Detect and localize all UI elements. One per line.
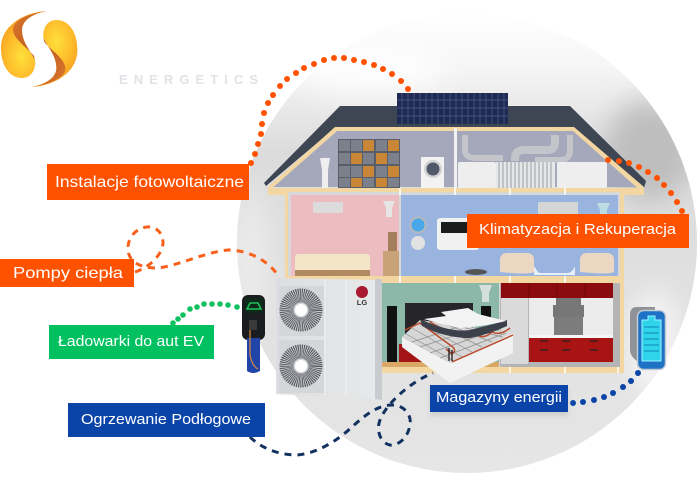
middle floor [288,276,624,283]
background circle [237,58,697,473]
heat pump unit [276,278,382,400]
attic interior [270,130,640,187]
connector: energy storage [570,370,641,406]
kitchen [500,283,620,367]
label: solar [47,164,249,200]
pink bedroom [291,195,399,277]
label: air conditioning: Klimatyzacja i Rekuperacja [479,221,677,238]
battery icon [630,307,666,370]
connector: air conditioning [605,157,685,214]
label: solar: Instalacje fotowoltaiczne [55,174,244,191]
roof [264,106,646,188]
label: EV chargers [49,325,214,359]
label: energy storage: Magazyny energii [436,389,562,406]
brand name: ENERGETICS [119,72,258,87]
fan bottom [279,340,324,393]
connector: underfloor heating [250,373,433,455]
connector: EV charger [170,301,240,326]
label: heat pumps: Pompy ciepła [13,265,123,282]
attic floor [268,188,644,195]
logo right lobe [31,20,77,87]
logo left lobe [1,11,47,78]
label: air conditioning [467,214,689,248]
label: underfloor heating: Ogrzewanie Podłogowe [81,411,251,428]
connector: heat pump [128,227,279,277]
attic divider [454,128,457,189]
bottom floor [288,367,624,373]
underfloor heating block [402,308,513,383]
vase duct [320,158,330,188]
LG logo: LG [357,298,367,307]
house [264,93,646,373]
EV charger [242,295,265,373]
green bedroom [381,283,499,367]
blue living room [401,195,618,276]
washing machine [421,157,444,188]
fan top [279,286,324,336]
outer walls [285,190,624,372]
label: heat pumps [0,259,134,287]
roof insulation [267,127,644,192]
connector: solar panels [248,55,411,166]
label: EV chargers: Ładowarki do aut EV [58,333,204,350]
ventilation ducts [465,135,570,161]
label: underfloor heating [68,403,265,437]
storage shelves [338,139,400,188]
ventilation units [458,162,607,188]
logo icon [1,11,77,87]
solar panel [397,93,508,124]
label: energy storage [430,385,568,416]
